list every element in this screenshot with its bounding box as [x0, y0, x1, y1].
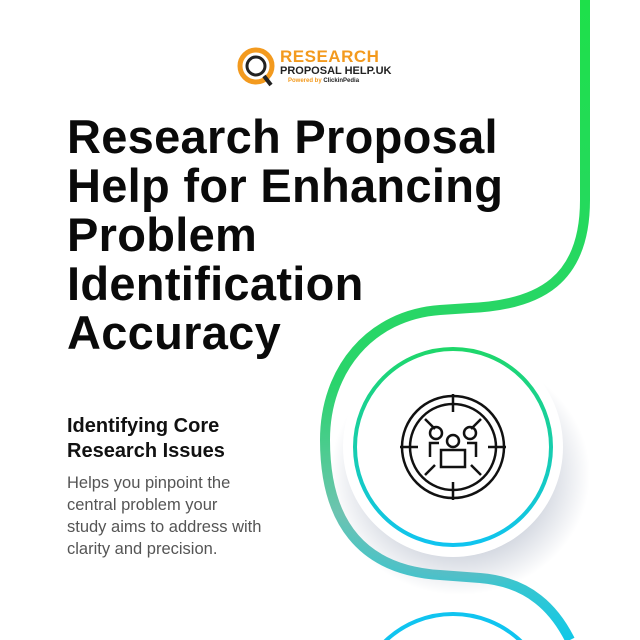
body text: study aims to address with: [67, 518, 261, 536]
logo: Powered by ClickinPedia: [288, 78, 359, 84]
subheading: Research Issues: [67, 440, 225, 462]
body text: Helps you pinpoint the: [67, 474, 230, 492]
title: Identification Accuracy: [67, 257, 364, 359]
subheading: [67, 415, 225, 462]
body text: clarity and precision.: [67, 540, 217, 558]
logo: [238, 47, 392, 86]
logo: RESEARCH: [280, 47, 379, 66]
title: [67, 110, 503, 359]
body text: [67, 474, 261, 558]
title: Research Proposal Help for Enhancing Problem: [67, 110, 503, 261]
subheading: Identifying Core: [67, 415, 219, 437]
body text: central problem your: [67, 496, 217, 514]
logo: PROPOSAL HELP.UK: [280, 65, 391, 77]
